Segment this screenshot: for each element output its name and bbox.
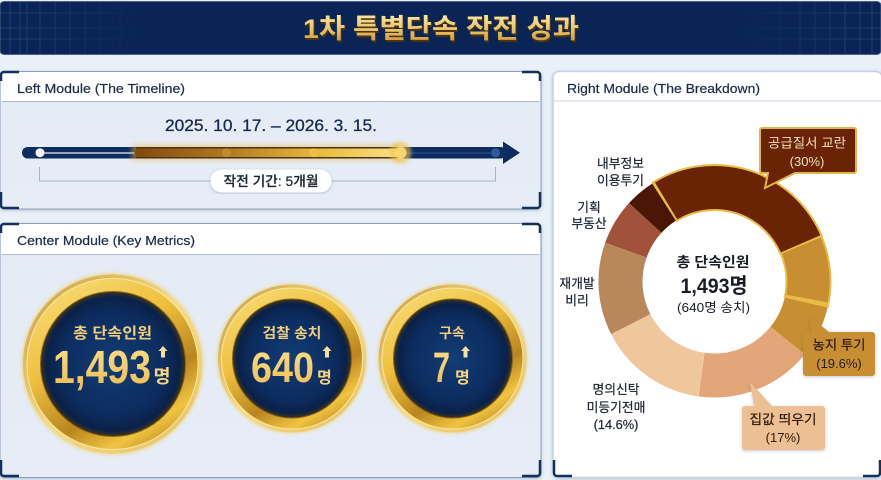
- callout: farmland speculation 19.6%: [803, 315, 875, 376]
- callout: supply disruption 30%: [760, 128, 856, 188]
- duration bracket: [40, 167, 496, 181]
- donut centre total: 총 단속인원: [676, 254, 750, 270]
- callout: supply disruption 30%: 공급질서 교란: [768, 136, 846, 150]
- metric: referred to prosecution: 640: [251, 344, 314, 392]
- metric: referred to prosecution: 검찰 송치: [262, 325, 322, 341]
- panel: breakdown: [553, 72, 881, 478]
- panel header: timeline: Left Module (The Timeline): [17, 81, 185, 96]
- panel header: key metrics: [1, 224, 540, 254]
- label: insider information: 이용투기: [597, 173, 644, 188]
- panel: timeline: [0, 72, 541, 209]
- donut chart: [582, 149, 847, 414]
- date range: 2025. 10. 17. – 2026. 3. 15.: [165, 116, 377, 135]
- metric: referred to prosecution: [217, 284, 367, 434]
- label: insider information: 내부정보: [597, 156, 644, 171]
- metric: detained: 7: [433, 344, 450, 392]
- donut centre total: [676, 254, 750, 315]
- metric: referred to prosecution: 명: [317, 369, 332, 387]
- metric: total arrests: 1,493: [53, 341, 151, 393]
- panel: key metrics: [0, 224, 541, 478]
- callout: farmland speculation 19.6%: (19.6%): [816, 356, 862, 371]
- label: planned real estate: 부동산: [571, 216, 607, 231]
- metric: total arrests: 총 단속인원: [73, 325, 152, 342]
- metric: total arrests: 명: [154, 366, 171, 387]
- label: redevelopment: 재개발: [559, 276, 595, 291]
- callout: farmland speculation 19.6%: 농지 투기: [812, 338, 866, 352]
- callout: price inflating 17%: 집값 띄우기: [750, 412, 816, 427]
- title banner: 1차 특별단속 작전 성과: [303, 14, 579, 44]
- label: title trust 14.6%: [587, 382, 645, 432]
- label: redevelopment: 비리: [565, 293, 589, 308]
- duration pill: [210, 170, 332, 192]
- metric: detained: 구속: [439, 325, 465, 341]
- title banner: [0, 2, 881, 54]
- donut centre total: (640명 송치): [677, 300, 750, 315]
- timeline arrow: [22, 142, 520, 164]
- label: title trust 14.6%: 미등기전매: [587, 400, 645, 415]
- label: title trust 14.6%: 명의신탁: [592, 382, 640, 397]
- label: title trust 14.6%: (14.6%): [594, 417, 638, 432]
- metric: total arrests: [22, 273, 204, 455]
- callout: price inflating 17%: (17%): [766, 430, 800, 445]
- label: insider information: [597, 156, 644, 188]
- duration pill: 작전 기간: 5개월: [224, 173, 318, 189]
- panel header: timeline: [1, 72, 540, 102]
- label: redevelopment: [559, 276, 595, 308]
- callout: supply disruption 30%: (30%): [790, 154, 824, 169]
- label: planned real estate: [571, 200, 607, 231]
- metric: detained: 명: [455, 369, 470, 387]
- panel heading: breakdown: Right Module (The Breakdown): [567, 81, 760, 96]
- label: planned real estate: 기획: [577, 200, 601, 215]
- callout: price inflating 17%: [742, 382, 825, 450]
- panel header: key metrics: Center Module (Key Metrics): [17, 233, 195, 248]
- metric: detained: [378, 284, 528, 434]
- donut centre total: 1,493명: [680, 275, 748, 298]
